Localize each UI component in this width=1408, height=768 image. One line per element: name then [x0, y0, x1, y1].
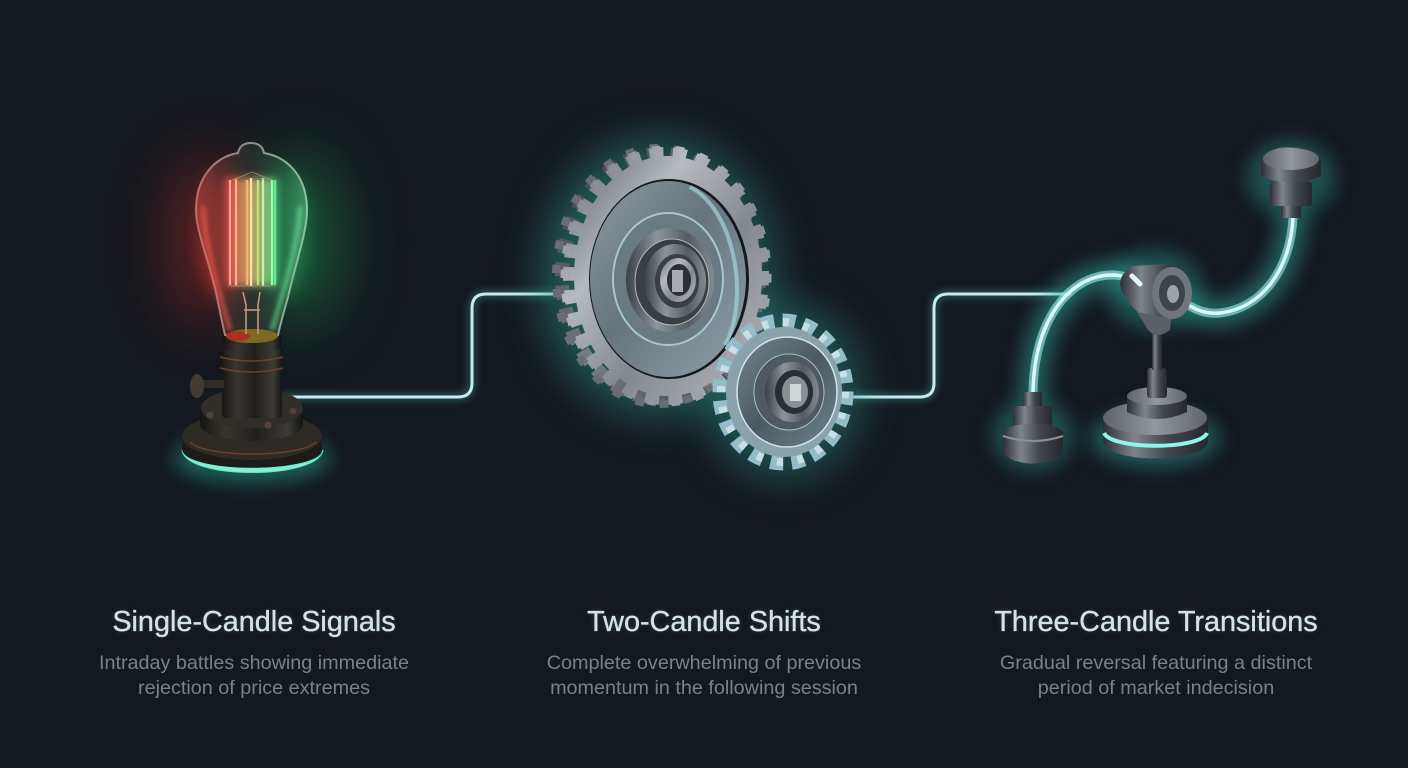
description: rejection of price extremes	[138, 677, 370, 699]
description	[99, 652, 409, 699]
description: Intraday battles showing immediate	[99, 652, 409, 674]
description: momentum in the following session	[550, 677, 858, 699]
column: single-candle signals	[99, 606, 409, 699]
heading: Two-Candle Shifts	[587, 606, 821, 638]
icon: filaments	[226, 172, 277, 286]
panel: single candle bulb	[168, 143, 344, 482]
gear glow	[542, 139, 859, 475]
icon: large gear	[556, 148, 768, 404]
icon: metal lamp base	[182, 335, 322, 468]
panel: two candle gears	[542, 139, 859, 475]
panel: three candle fibre assembly	[993, 140, 1335, 471]
icon: glass bulb	[196, 143, 307, 343]
description: period of market indecision	[1038, 677, 1274, 699]
heading: Single-Candle Signals	[112, 606, 396, 638]
column: three-candle transitions	[994, 606, 1318, 699]
icon: small crystal gear	[721, 322, 845, 462]
fibre bundles	[1033, 218, 1293, 395]
icon: base glow ring	[174, 434, 330, 482]
description: Gradual reversal featuring a distinct	[1000, 652, 1312, 674]
description	[1000, 652, 1312, 699]
description	[547, 652, 861, 699]
heading: Three-Candle Transitions	[994, 606, 1318, 638]
red and green bulb glow	[168, 150, 344, 330]
wires	[285, 294, 1070, 397]
icon: left foot connector	[1003, 392, 1063, 464]
fibre glow	[993, 140, 1335, 471]
icon: pivot on stand	[1103, 264, 1208, 458]
description: Complete overwhelming of previous	[547, 652, 861, 674]
icon: top cap connector	[1261, 147, 1321, 218]
column: two-candle shifts	[547, 606, 861, 699]
